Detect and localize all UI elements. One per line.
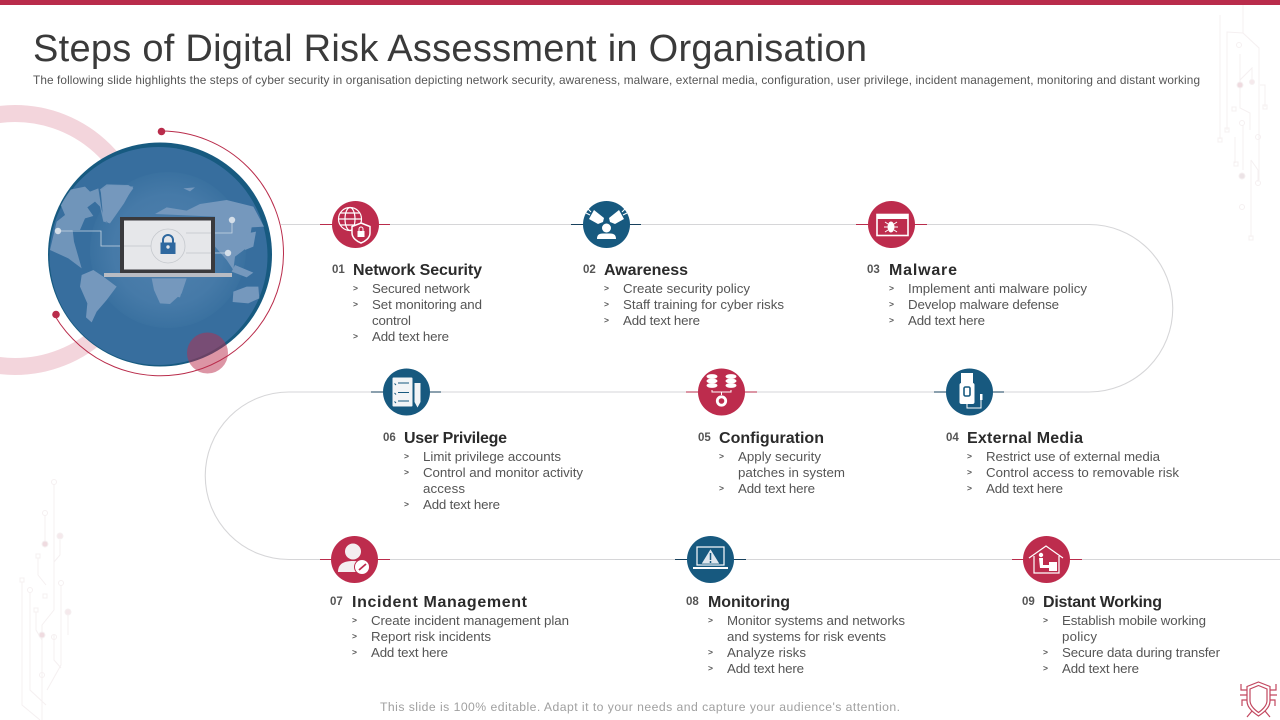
step 01: network security: 01 — [332, 264, 345, 276]
step 04: external media: > — [967, 451, 972, 461]
step 05: configuration: > — [719, 483, 724, 493]
step 07: incident management: > — [352, 647, 357, 657]
step 01: network security: control — [372, 313, 411, 328]
step 04: external media: Restrict use of external media — [986, 449, 1161, 464]
step 06: user privilege: > — [404, 499, 409, 509]
step 06: user privilege: 06 — [383, 432, 396, 444]
step 06: user privilege: Control and monitor activity — [423, 465, 583, 480]
title: Steps of Digital Risk Assessment in Organisation — [33, 28, 867, 70]
step 09: distant working: Distant Working — [1043, 594, 1162, 611]
step 07: incident management: Add text here — [371, 645, 448, 660]
step 03: malware: Implement anti malware policy — [908, 281, 1087, 296]
step 01: network security — [332, 262, 482, 344]
step 02: awareness: > — [604, 299, 609, 309]
footer note: This slide is 100% editable. Adapt it to your needs and capture your audience's attention. — [380, 700, 900, 714]
step 04: external media — [946, 430, 1179, 496]
globe disc — [48, 142, 272, 366]
icon: distant working — [1012, 536, 1082, 583]
padlock — [151, 229, 185, 263]
step 08: monitoring: > — [708, 663, 713, 673]
step 08: monitoring: > — [708, 615, 713, 625]
step 01: network security: > — [353, 299, 358, 309]
step 03: malware: > — [889, 315, 894, 325]
step 09: distant working: > — [1043, 647, 1048, 657]
step 06: user privilege: Add text here — [423, 497, 500, 512]
step 03: malware: Develop malware defense — [908, 297, 1059, 312]
step 03: malware: > — [889, 283, 894, 293]
step 01: network security: > — [353, 283, 358, 293]
step 03: malware — [867, 262, 1087, 328]
step 07: incident management: Report risk incidents — [371, 629, 491, 644]
step 03: malware: > — [889, 299, 894, 309]
step 05: configuration: > — [719, 451, 724, 461]
step 07: incident management: 07 — [330, 596, 343, 608]
step 02: awareness: > — [604, 283, 609, 293]
step 04: external media: Control access to removable risk — [986, 465, 1179, 480]
step 09: distant working: Establish mobile working — [1062, 613, 1206, 628]
icon: malware — [856, 201, 927, 248]
step 07: incident management — [330, 594, 569, 660]
step 07: incident management: Create incident management plan — [371, 613, 569, 628]
step 09: distant working — [1022, 594, 1221, 676]
circuit decoration: top right — [1218, 5, 1267, 240]
translucent circle — [187, 332, 228, 374]
step 05: configuration: Apply security — [738, 449, 821, 464]
step 06: user privilege: > — [404, 451, 409, 461]
icon: shield logo — [1240, 682, 1277, 717]
step 02: awareness: Awareness — [604, 262, 688, 279]
step 02: awareness: Create security policy — [623, 281, 750, 296]
step 01: network security: > — [353, 331, 358, 341]
step 09: distant working: > — [1043, 615, 1048, 625]
step 05: configuration: 05 — [698, 432, 711, 444]
icon: incident management — [320, 536, 390, 583]
network nodes — [55, 228, 61, 234]
network lines — [58, 220, 232, 253]
step 05: configuration: Configuration — [719, 430, 824, 447]
step 07: incident management: > — [352, 615, 357, 625]
step 08: monitoring: 08 — [686, 596, 699, 608]
step 06: user privilege: Limit privilege accounts — [423, 449, 561, 464]
pink ring — [0, 114, 142, 366]
step 02: awareness — [583, 262, 784, 328]
step 08: monitoring: Add text here — [727, 661, 804, 676]
step 08: monitoring: and systems for risk events — [727, 629, 886, 644]
icon: user privilege — [371, 368, 441, 416]
step 01: network security: Set monitoring and — [372, 297, 482, 312]
globe illustration — [0, 114, 284, 376]
step 04: external media: > — [967, 483, 972, 493]
step 04: external media: > — [967, 467, 972, 477]
icon: external media — [934, 368, 1004, 416]
top bar — [0, 0, 1280, 5]
step 09: distant working: Add text here — [1062, 661, 1139, 676]
step 08: monitoring: > — [708, 647, 713, 657]
step 08: monitoring: Monitor systems and networks — [727, 613, 905, 628]
step 06: user privilege: > — [404, 467, 409, 477]
step 04: external media: Add text here — [986, 481, 1063, 496]
step 03: malware: 03 — [867, 264, 880, 276]
step 07: incident management: Incident Management — [352, 594, 528, 611]
step 09: distant working: 09 — [1022, 596, 1035, 608]
circuit decoration: bottom left — [20, 480, 71, 720]
step 03: malware: Add text here — [908, 313, 985, 328]
step 06: user privilege — [383, 430, 583, 512]
step 05: configuration: Add text here — [738, 481, 815, 496]
icon: monitoring — [675, 536, 746, 583]
icon: awareness — [571, 201, 641, 248]
step 03: malware: Malware — [889, 262, 957, 279]
step 04: external media: External Media — [967, 430, 1083, 447]
step 09: distant working: Secure data during transfer — [1062, 645, 1221, 660]
step 07: incident management: > — [352, 631, 357, 641]
step 04: external media: 04 — [946, 432, 959, 444]
step 01: network security: Network Security — [353, 262, 482, 279]
step 08: monitoring — [686, 594, 905, 676]
timeline path — [205, 224, 1280, 560]
step 06: user privilege: User Privilege — [404, 430, 507, 447]
step 08: monitoring: Monitoring — [708, 594, 790, 611]
icon: network security — [320, 201, 390, 248]
step 02: awareness: > — [604, 315, 609, 325]
step 02: awareness: Staff training for cyber risks — [623, 297, 784, 312]
step 05: configuration — [698, 430, 845, 496]
step 01: network security: Secured network — [372, 281, 470, 296]
step 09: distant working: > — [1043, 663, 1048, 673]
continents — [50, 184, 264, 322]
thin orbit arc — [55, 131, 284, 376]
laptop — [120, 217, 215, 273]
step 02: awareness: Add text here — [623, 313, 700, 328]
step 08: monitoring: Analyze risks — [727, 645, 806, 660]
step 01: network security: Add text here — [372, 329, 449, 344]
icon: configuration — [686, 368, 757, 416]
step 09: distant working: policy — [1062, 629, 1097, 644]
step 05: configuration: patches in system — [738, 465, 845, 480]
subtitle: The following slide highlights the steps of cyber security in organisation depicting network security, awareness, malware, external media, configuration, user privilege, incident management, monitoring and distant working — [33, 73, 1200, 87]
step 06: user privilege: access — [423, 481, 465, 496]
step 02: awareness: 02 — [583, 264, 596, 276]
